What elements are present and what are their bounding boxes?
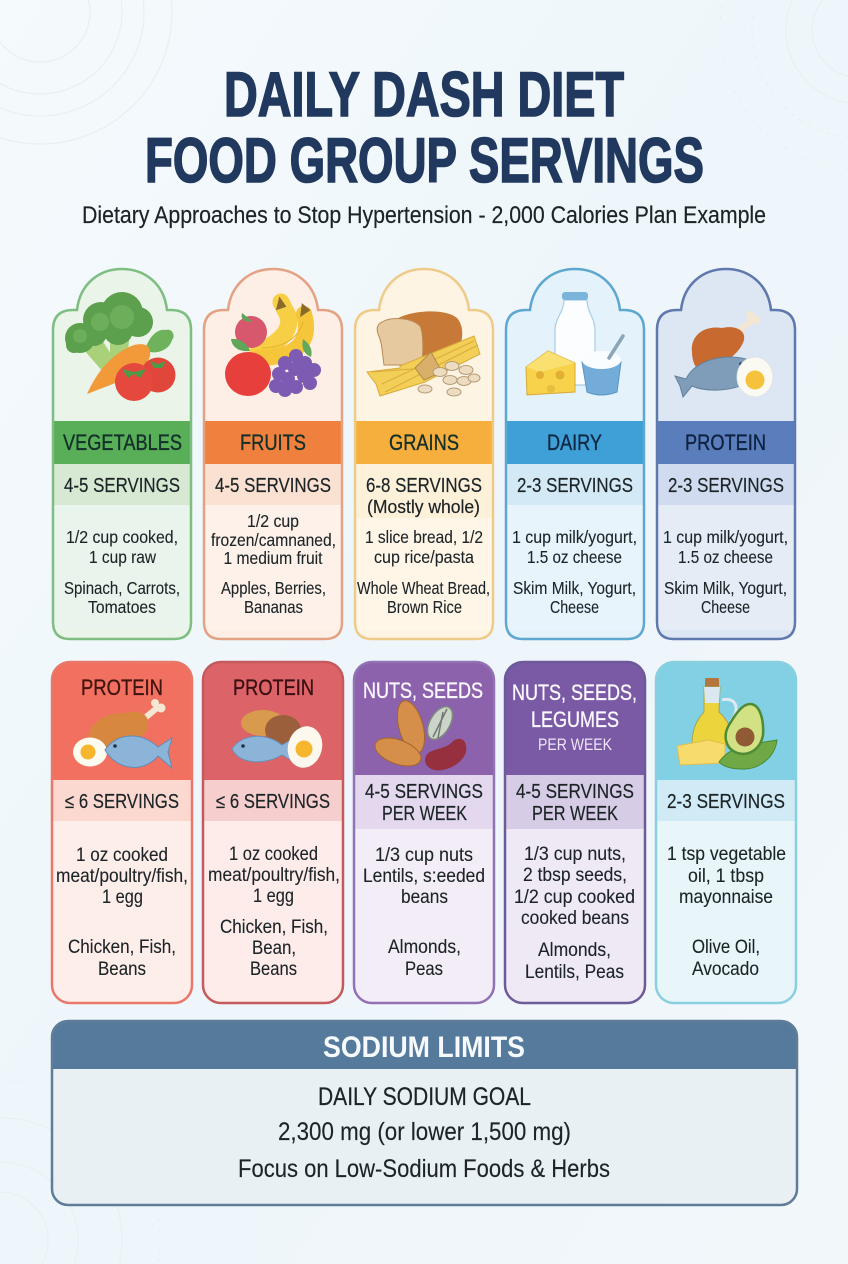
examples: Olive Oil, (692, 937, 760, 958)
serving size (56, 845, 188, 908)
panel: vegetables (53, 269, 191, 639)
sodium goal text (238, 1083, 610, 1183)
serving size (365, 527, 483, 567)
serving size: 1 egg (253, 886, 294, 907)
examples: Skim Milk, Yogurt, (513, 578, 636, 598)
icon: broccoli carrot tomatoes (65, 292, 176, 401)
heading: nuts seeds legumes: NUTS, SEEDS, (512, 680, 637, 705)
serving size: 1 oz cooked (229, 844, 318, 865)
servings: 2-3 SERVINGS (668, 475, 784, 497)
examples: Chicken, Fish, (220, 917, 328, 938)
icon: apples bananas grapes (225, 300, 321, 397)
icon: meat fish egg (232, 710, 327, 772)
serving size (512, 527, 637, 567)
icon: oil butter avocado (677, 678, 777, 769)
icon: chicken fish egg (73, 699, 172, 768)
servings: 4-5 SERVINGS (516, 781, 634, 803)
panel: protein limit B (203, 662, 343, 1003)
examples (357, 578, 490, 617)
serving size (363, 845, 485, 908)
serving size (211, 511, 336, 568)
servings: 4-5 SERVINGS (215, 475, 331, 497)
examples: Apples, Berries, (221, 578, 326, 598)
servings: ≤ 6 SERVINGS (216, 791, 330, 813)
serving size: beans (401, 887, 448, 908)
serving size: 1 oz cooked (76, 845, 168, 866)
serving size: Lentils, s:eeded (363, 866, 485, 887)
panel: protein (657, 269, 795, 639)
serving size: 1/2 cup cooked, (66, 527, 178, 547)
serving size: 1/2 cup (247, 511, 299, 531)
serving size: 1/2 cup cooked (514, 887, 635, 908)
serving size: frozen/camnaned, (211, 530, 336, 550)
icon: bread pasta beans (367, 311, 480, 396)
icon: milk cheese yogurt (526, 292, 623, 395)
servings: ≤ 6 SERVINGS (65, 791, 179, 813)
serving size: 1/3 cup nuts (375, 845, 473, 866)
serving size: meat/poultry/fish, (56, 866, 188, 887)
serving size: 1 cup milk/yogurt, (663, 527, 788, 547)
heading: grains: GRAINS (389, 430, 459, 455)
panel: oils (656, 662, 796, 1003)
servings: 4-5 SERVINGS (64, 475, 180, 497)
servings (366, 475, 482, 517)
serving size: 1.5 oz cheese (678, 547, 773, 567)
serving size: 1 cup raw (89, 547, 156, 567)
servings: 4-5 SERVINGS (365, 781, 483, 803)
examples: Bean, (252, 938, 296, 959)
servings: PER WEEK (382, 803, 468, 825)
examples: Avocado (692, 959, 759, 980)
examples (68, 937, 176, 980)
panel: protein limit A (52, 662, 192, 1003)
sodium goal text: 2,300 mg (or lower 1,500 mg) (278, 1118, 571, 1146)
servings (516, 781, 634, 825)
examples: Peas (405, 959, 443, 980)
heading: dairy: DAIRY (547, 430, 602, 455)
heading: nuts seeds: NUTS, SEEDS (363, 678, 483, 703)
heading: nuts seeds legumes (512, 680, 637, 754)
heading: vegetables: VEGETABLES (63, 430, 182, 455)
serving size (514, 844, 635, 929)
examples: Tomatoes (88, 597, 156, 617)
servings: (Mostly whole) (367, 497, 480, 517)
heading: sodium limits: SODIUM LIMITS (323, 1031, 525, 1064)
examples: Bananas (244, 597, 303, 617)
examples: Beans (98, 959, 146, 980)
examples (220, 917, 328, 980)
examples: Chicken, Fish, (68, 937, 176, 958)
examples (221, 578, 326, 617)
servings: 6-8 SERVINGS (366, 475, 482, 497)
title (145, 60, 704, 196)
sodium goal text: Focus on Low-Sodium Foods & Herbs (238, 1155, 610, 1183)
heading: nuts seeds legumes: LEGUMES (531, 707, 619, 732)
panel: fruits (204, 269, 342, 639)
servings: 2-3 SERVINGS (667, 791, 785, 813)
sodium goal text: DAILY SODIUM GOAL (318, 1083, 531, 1111)
examples: Whole Wheat Bread, (357, 578, 490, 598)
serving size: 1 slice bread, 1/2 (365, 527, 483, 547)
servings: PER WEEK (532, 803, 619, 825)
examples: Lentils, Peas (525, 962, 624, 983)
panel: nuts seeds legumes (505, 662, 645, 1003)
examples: Almonds, (388, 937, 461, 958)
examples (388, 937, 461, 980)
title: DAILY DASH DIET (224, 60, 624, 130)
icon: chicken fish egg (675, 311, 773, 397)
serving size: meat/poultry/fish, (208, 865, 340, 886)
examples (64, 578, 180, 617)
servings (365, 781, 483, 825)
heading: protein: PROTEIN (233, 675, 314, 700)
examples: Cheese (701, 597, 750, 617)
heading: nuts seeds legumes: PER WEEK (538, 735, 613, 754)
examples (525, 940, 624, 983)
serving size: 1 tsp vegetable (667, 844, 786, 865)
examples: Skim Milk, Yogurt, (664, 578, 787, 598)
serving size: mayonnaise (679, 887, 773, 908)
serving size: 1 egg (102, 887, 143, 908)
panel: grains (355, 269, 493, 639)
heading: fruits: FRUITS (240, 430, 306, 455)
examples (664, 578, 787, 617)
examples (692, 937, 760, 980)
serving size: 1.5 oz cheese (527, 547, 622, 567)
examples: Brown Rice (387, 597, 462, 617)
serving size (667, 844, 786, 908)
serving size (66, 527, 178, 567)
serving size: 1/3 cup nuts, (524, 844, 626, 865)
subtitle: Dietary Approaches to Stop Hypertension - 2,000 Calories Plan Example (82, 202, 766, 229)
serving size: 1 cup milk/yogurt, (512, 527, 637, 547)
examples: Spinach, Carrots, (64, 578, 180, 598)
icon: almonds seed bean (371, 698, 466, 771)
panel: sodium limits (52, 1021, 797, 1205)
heading: protein: PROTEIN (81, 675, 163, 700)
examples: Beans (250, 959, 297, 980)
examples (513, 578, 636, 617)
serving size: 1 medium fruit (224, 548, 323, 568)
heading: protein: PROTEIN (685, 430, 766, 455)
serving size: oil, 1 tbsp (688, 866, 764, 887)
serving size (208, 844, 340, 907)
serving size: cup rice/pasta (374, 547, 474, 567)
serving size: cooked beans (521, 908, 629, 929)
panel: dairy (506, 269, 644, 639)
examples: Cheese (550, 597, 599, 617)
serving size: 2 tbsp seeds, (523, 865, 627, 886)
panel: nuts seeds (354, 662, 494, 1003)
serving size (663, 527, 788, 567)
servings: 2-3 SERVINGS (517, 475, 633, 497)
examples: Almonds, (538, 940, 611, 961)
